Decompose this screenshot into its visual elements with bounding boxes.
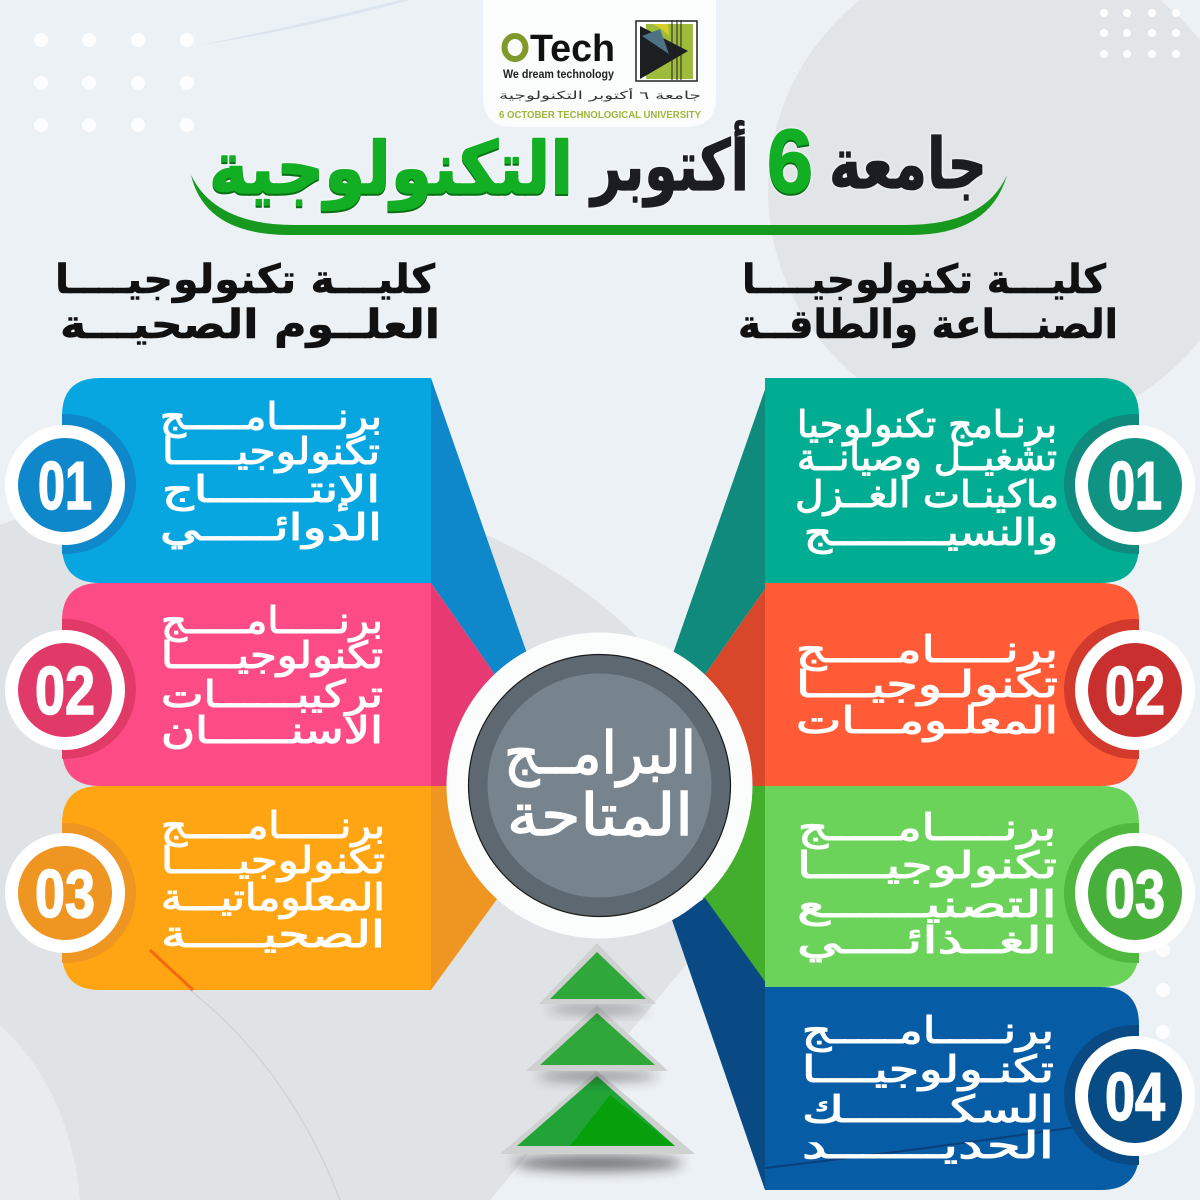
text: تشغيــل وصيانــة [797, 436, 1057, 479]
text: الاسنــــــان [161, 709, 383, 752]
text [161, 599, 383, 752]
text: تكنولوجيـــــا [162, 430, 380, 473]
text: تركيبــــــات [161, 673, 383, 716]
text: والنسيـــــــــج [804, 511, 1058, 554]
badge 03 [1064, 823, 1200, 963]
badge 02: 02 [1105, 653, 1165, 729]
badge 01 [1064, 414, 1200, 554]
fold connectors [431, 378, 769, 1190]
logo: OTech wordmark: Tech [530, 28, 615, 70]
logo: english name: 6 OCTOBER TECHNOLOGICAL UNIVERSITY [499, 110, 701, 121]
text: الإنتـــــــاج [162, 468, 380, 511]
text: التصنيــــــع [797, 883, 1057, 926]
badge 02: 02 [35, 653, 95, 729]
text: تكنولـوجيــــا [796, 663, 1058, 706]
text [795, 403, 1059, 554]
panel: right 02 information technology [765, 583, 1200, 786]
panel: left 01 pharmaceutical production [0, 378, 431, 583]
title: 6 [767, 112, 813, 212]
text: برنـــــامـــــج [160, 395, 382, 438]
badge 01: 01 [1108, 448, 1162, 524]
title: أكتوبر [589, 120, 749, 207]
title: التكنولوجية [209, 126, 573, 211]
text [160, 395, 382, 549]
panel: left 03 health informatics [0, 786, 431, 990]
heading: health sciences college [55, 257, 440, 348]
badge 02 [1064, 619, 1200, 759]
decorative dots: right side [1156, 943, 1170, 1039]
text: برنـامج تكنولوجيا [797, 403, 1057, 446]
logo: arabic name: جامعة ٦ أكتوبر التكنولوجية [499, 88, 701, 102]
panel: right 01 spinning and weaving machines [765, 378, 1200, 583]
text: برنـــــامـــــج [161, 599, 383, 642]
text [797, 806, 1057, 962]
text: برنـــــامـــــج [161, 804, 385, 847]
logo: university emblem [636, 20, 697, 81]
center hub: available programs: البرامــج [504, 719, 696, 788]
text: برنـــــامـــــج [796, 628, 1058, 671]
panel: right 04 railways [765, 987, 1200, 1190]
logo panel [483, 0, 716, 127]
text: الحديـــــــد [802, 1124, 1054, 1167]
badge 04: 04 [1105, 1059, 1165, 1135]
heading: health sciences college: العلــوم الصحيـــة [60, 302, 440, 348]
badge 04 [1064, 1025, 1200, 1165]
text: الصحيـــــة [161, 913, 385, 956]
text: تكنولوجيـــــا [797, 844, 1057, 887]
text: السكـــــــك [802, 1088, 1054, 1131]
heading: industry and energy college [738, 257, 1118, 348]
title swoosh [191, 175, 1007, 235]
title [209, 112, 987, 212]
title: جامعة [829, 123, 987, 205]
text: المعلـومـــات [796, 699, 1058, 742]
decorative dots: top right [1100, 9, 1180, 58]
text: تكنولوجيـــــا [161, 839, 385, 882]
badge 01: 01 [38, 448, 92, 524]
text: الدوائـــــي [160, 506, 382, 549]
badge 02 [0, 619, 136, 759]
badge 03: 03 [35, 856, 95, 932]
center hub: available programs: المتاحة [507, 781, 693, 849]
panel: right 03 food manufacturing [765, 786, 1200, 987]
logo: OTech wordmark: We dream technology [503, 69, 615, 81]
text: تكنـولوجيــــا [802, 1048, 1054, 1091]
text: الغــذائــــي [797, 919, 1057, 962]
text: المعلوماتيـــة [161, 876, 385, 919]
text: برنـــــامـــــج [798, 806, 1056, 849]
decorative dots: top left [34, 33, 194, 132]
badge 03 [0, 823, 136, 963]
logo: OTech wordmark [503, 28, 615, 81]
heading: industry and energy college: كليـــة تكنولوجيــــا [742, 257, 1107, 303]
panel: left 02 dental prosthetics [0, 583, 431, 786]
heading: health sciences college: كليـــة تكنولوجيــــا [55, 257, 436, 303]
triangles stack icon [500, 943, 695, 1171]
text [161, 804, 385, 956]
text: برنـــــامـــــج [802, 1009, 1054, 1052]
text [796, 628, 1058, 742]
text: تكنولوجيـــــا [161, 634, 383, 677]
text [802, 1009, 1054, 1167]
center hub: available programs [446, 632, 752, 938]
text: ماكينـات الغــزل [795, 473, 1059, 516]
badge 03: 03 [1105, 856, 1165, 932]
heading: industry and energy college: الصنـــاعة والطاقــة [738, 302, 1118, 348]
badge 01 [0, 414, 136, 554]
